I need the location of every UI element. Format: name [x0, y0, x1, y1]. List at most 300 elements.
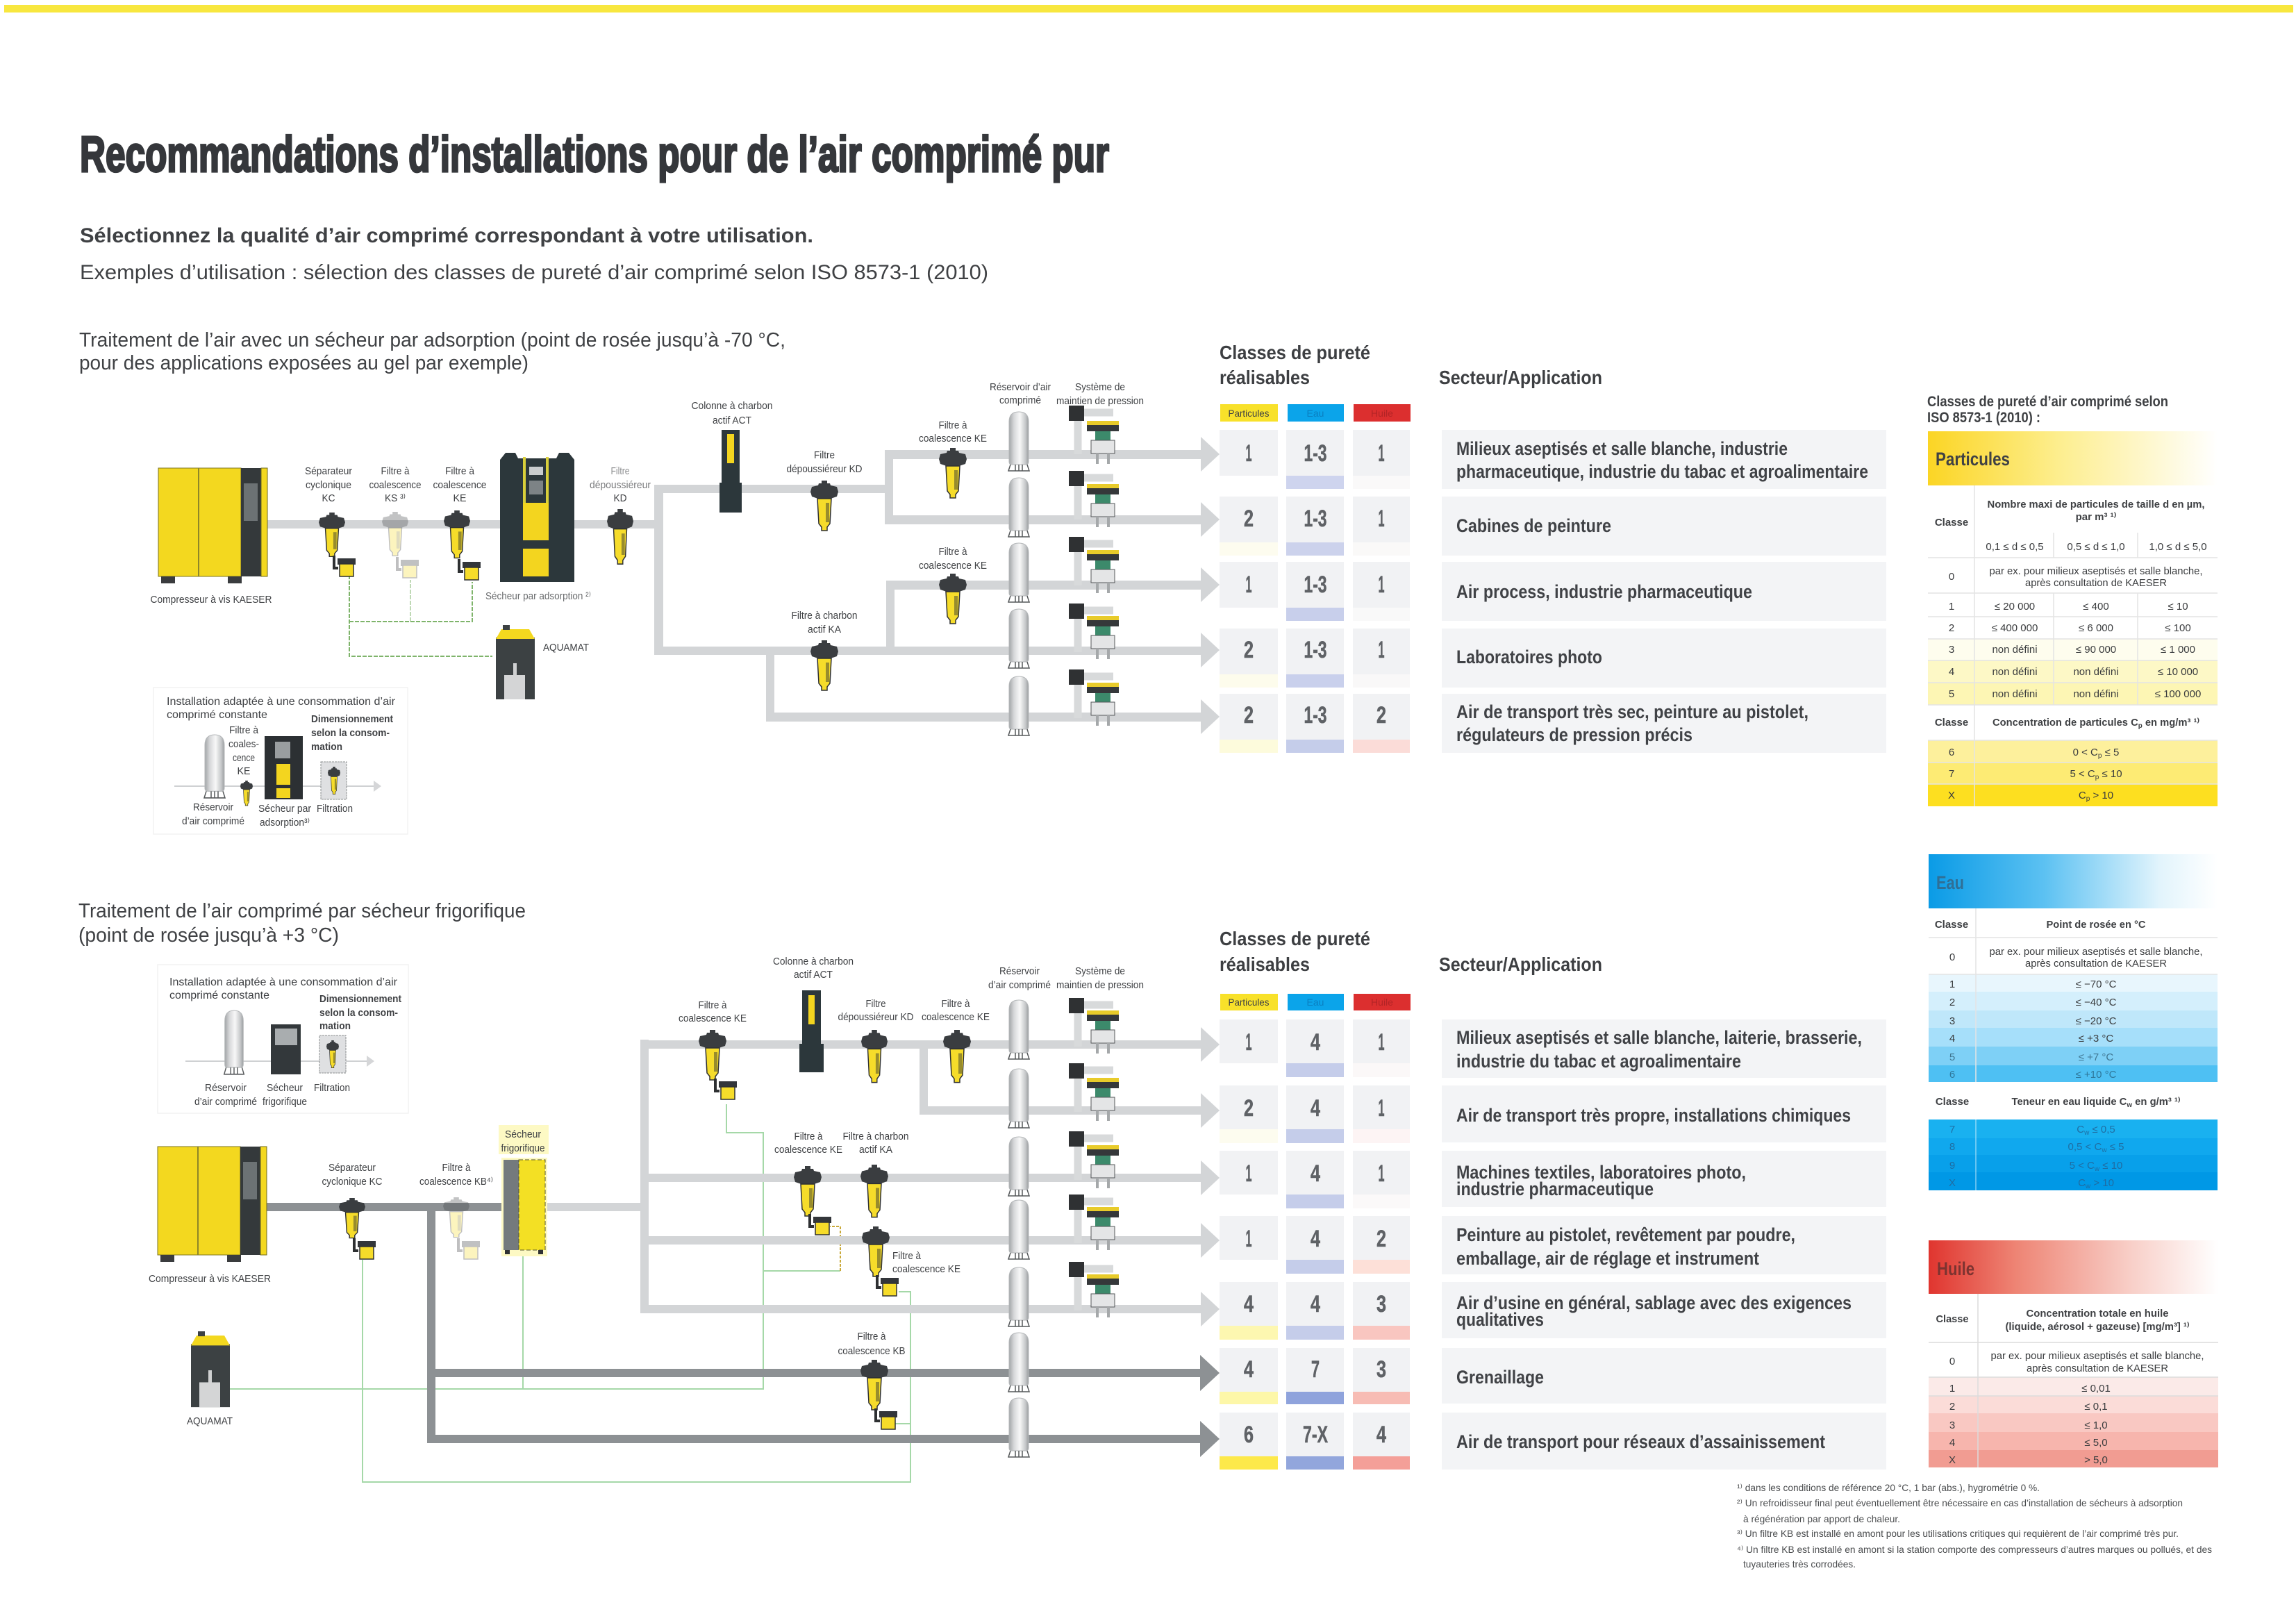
table: particules: ≤ 100 [2165, 622, 2191, 634]
inset: constant consumption (adsorption): selon la consom- [311, 727, 390, 739]
refrigerated dryer: Sécheur [505, 1129, 541, 1140]
table: eau: Classe [1936, 1096, 1969, 1108]
applications list, bottom: Grenaillage [1456, 1367, 1544, 1388]
applications list, bottom: qualitatives [1456, 1309, 1544, 1330]
applications list, top: Air de transport très sec, peinture au pistolet, [1456, 701, 1808, 722]
table: particules: ≤ 6 000 [2079, 622, 2113, 634]
table: huile: Classe [1936, 1313, 1968, 1325]
table: particules: ≤ 20 000 [1995, 601, 2035, 613]
dust filter KD (main line) [786, 449, 863, 531]
section heading: adsorption dryer: pour des applications exposées au gel par exemple) [79, 352, 529, 374]
table: eau: ≤ +3 °C [2079, 1033, 2113, 1044]
table: eau: ≤ +7 °C [2079, 1051, 2113, 1063]
purity class grid, bottom: 1 [1378, 1029, 1385, 1056]
inset: constant consumption (refrigerated): frigorifique [263, 1096, 307, 1108]
table: particules: 5 < C [2070, 768, 2095, 780]
inset: constant consumption (refrigerated): comprimé constante [169, 990, 269, 1001]
inset: constant consumption (adsorption) [153, 688, 408, 834]
purity class grid, bottom: 7 [1311, 1356, 1320, 1383]
table: particules: p [2138, 722, 2143, 730]
compressed air tanks: d’air comprimé [988, 979, 1051, 991]
table: eau: X [1949, 1177, 1956, 1189]
table: eau: w [2126, 1101, 2132, 1109]
coalescing filter KE top branch: Filtre à [939, 419, 967, 431]
pressure maintenance systems: Système de [1075, 381, 1125, 393]
table: eau: 1 [1949, 979, 1955, 990]
purity class grid, bottom: 1 [1246, 1160, 1251, 1187]
dust filter KD [590, 465, 651, 564]
activated carbon filter KA: actif KA [808, 624, 841, 635]
coalescing filter KE: coalescence [433, 479, 486, 491]
table: particules: 7 [1949, 768, 1954, 780]
purity classes table header, bottom: Particules [1228, 997, 1270, 1008]
applications list, bottom: industrie pharmaceutique [1456, 1179, 1654, 1199]
table: eau: ≤ +10 °C [2076, 1069, 2117, 1081]
table heading: ISO classes [1927, 394, 2168, 426]
pressure maintenance systems: Système de [1075, 965, 1125, 977]
table: eau: 9 [1949, 1160, 1955, 1172]
inset: constant consumption (refrigerated): selon la consom- [319, 1007, 398, 1019]
table: huile: ≤ 0,01 [2081, 1383, 2111, 1395]
inset: constant consumption (refrigerated): Réservoir [205, 1082, 247, 1094]
table: particules: 0,5 ≤ d ≤ 1,0 [2067, 541, 2125, 553]
table: eau: ≤ 0,5 [2089, 1124, 2115, 1135]
inset: constant consumption (refrigerated) [158, 965, 408, 1113]
coalescing filter KB [838, 1331, 906, 1429]
applications list, top: régulateurs de pression précis [1456, 724, 1692, 745]
table: eau: 2 [1949, 997, 1955, 1008]
purity class grid, top: 1 [1378, 572, 1385, 598]
table: huile: après consultation de KAESER [2027, 1363, 2168, 1374]
coalescing filter KB (faded): coalescence KB⁴⁾ [419, 1176, 493, 1188]
dust filter KD: dépoussiéreur KD [838, 1011, 914, 1023]
coalescing filter KS (faded): coalescence [369, 479, 421, 491]
table: huile: 4 [1949, 1437, 1955, 1449]
cyclonic separator KC: KC [322, 492, 335, 504]
compressed air tanks [990, 381, 1051, 735]
table: eau: ≤ −40 °C [2076, 997, 2117, 1008]
cyclonic separator KC [305, 465, 356, 576]
purity class grid, top: 1 [1378, 440, 1385, 467]
inset: constant consumption (refrigerated): mation [319, 1020, 351, 1032]
table: particules: 5 [1949, 688, 1954, 700]
table: particules: ≤ 400 [2083, 601, 2109, 613]
purity class grid, top: 1-3 [1304, 506, 1326, 532]
table: huile: ≤ 5,0 [2084, 1437, 2108, 1449]
table: particules: ≤ 1 000 [2161, 644, 2195, 656]
applications list, top: Laboratoires photo [1456, 647, 1602, 667]
purity class grid, top [1220, 430, 1410, 753]
table: particules: non défini [1992, 688, 2038, 700]
cyclonic separator KC: cyclonique [306, 479, 351, 491]
section heading: refrigerated dryer [78, 900, 526, 947]
purity class grid, bottom: 1 [1378, 1095, 1385, 1122]
purity class grid, bottom: 4 [1311, 1291, 1320, 1317]
table: huile: ≤ 0,1 [2084, 1401, 2108, 1413]
pressure maintenance systems: maintien de pression [1056, 979, 1144, 991]
coalescing filter KE top branch: coalescence KE [919, 433, 987, 444]
compressed air tanks: Réservoir [999, 965, 1040, 977]
applications list, top [1442, 430, 1886, 753]
table: huile: 1 [1949, 1383, 1955, 1395]
table: particules: 1 [1949, 601, 1954, 613]
applications list, bottom [1442, 1019, 1886, 1470]
table: particules: non défini [2073, 666, 2119, 678]
table: eau: C [2077, 1124, 2084, 1135]
inset: constant consumption (refrigerated): d’air comprimé [194, 1096, 257, 1108]
table: eau: w [2101, 1147, 2107, 1154]
table: eau: > 10 [2090, 1177, 2114, 1189]
coalescing filter KE top branch [919, 419, 987, 498]
footnotes: à régénération par apport de chaleur. [1743, 1513, 1900, 1524]
table: particules: 0 < C [2073, 747, 2098, 758]
AQUAMAT [187, 1331, 233, 1427]
purity class grid, bottom: 1 [1378, 1160, 1385, 1187]
footnotes: ³⁾ Un filtre KB est installé en amont pour les utilisations critiques qui requièrent de l’air comprimé très pur. [1737, 1528, 2179, 1539]
table: huile: ≤ 1,0 [2084, 1420, 2108, 1431]
purity classes table header, top: Eau [1307, 408, 1324, 419]
dashed drain [830, 1226, 840, 1271]
section heading: adsorption dryer: Traitement de l’air avec un sécheur par adsorption (point de rosée jusqu’à -70 °C, [79, 329, 785, 351]
pressure maintenance systems [1056, 965, 1144, 1317]
table: particules: par ex. pour milieux aseptisés et salle blanche, [1989, 565, 2203, 577]
table: eau: 5 [1949, 1051, 1955, 1063]
purity classes table header, top: Huile [1371, 408, 1393, 419]
coalescing filter KE: KE [453, 492, 467, 504]
title: Recommandations d’installations pour de l’air comprimé pur [80, 127, 1109, 183]
table: eau: par ex. pour milieux aseptisés et salle blanche, [1989, 946, 2203, 958]
table: particules: C [2079, 790, 2086, 801]
table: particules: non défini [1992, 644, 2038, 656]
inset: constant consumption (adsorption): Filtre à [229, 724, 259, 736]
table: eau [1929, 854, 2218, 1190]
inset: constant consumption (adsorption): Dimensionnement [311, 713, 393, 725]
table: eau: Teneur en eau liquide C [2011, 1096, 2129, 1108]
coalescing filter KE third branch: Filtre à [939, 546, 967, 558]
purity class grid, top: 1 [1246, 572, 1251, 598]
coalescing filter KE (fourth row) [862, 1226, 960, 1296]
table: particules: 2 [1949, 622, 1954, 634]
inset: constant consumption (refrigerated): Filtration [314, 1082, 350, 1094]
table: eau: ≤ −70 °C [2076, 979, 2117, 990]
compressor [150, 468, 272, 606]
purity class grid, bottom: 4 [1244, 1356, 1254, 1383]
table: particules: 4 [1949, 666, 1954, 678]
table: eau: 7 [1949, 1124, 1955, 1135]
sector heading, top: Secteur/Application [1439, 367, 1602, 388]
panel: refrigerated process diagram [149, 956, 1220, 1482]
compressor [149, 1147, 271, 1285]
purity class grid, top: 2 [1244, 506, 1254, 532]
applications list, bottom: Peinture au pistolet, revêtement par poudre, [1456, 1224, 1795, 1245]
table: eau: 6 [1949, 1069, 1955, 1081]
purity classes table header, bottom: Huile [1371, 997, 1393, 1008]
table: eau: Point de rosée en °C [2046, 919, 2146, 931]
purity classes table header, top: Particules [1228, 408, 1270, 419]
dust filter KD [838, 998, 914, 1083]
inset: constant consumption (adsorption): adsorption³⁾ [260, 817, 310, 829]
subtitle: Sélectionnez la qualité d’air comprimé correspondant à votre utilisation. [80, 224, 813, 247]
panel: adsorption process diagram [150, 381, 1220, 735]
activated carbon filter KA: actif KA [859, 1144, 892, 1156]
purity class grid, bottom: 4 [1311, 1095, 1320, 1122]
activated carbon filter KA [843, 1131, 908, 1217]
section heading: adsorption dryer [79, 329, 785, 374]
inset: constant consumption (adsorption): cence [233, 752, 255, 764]
purity class grid, bottom: 1 [1246, 1226, 1251, 1252]
purity classes table header, bottom [1220, 928, 1411, 1010]
inset: constant consumption (adsorption): Installation adaptée à une consommation d’air [167, 696, 396, 708]
table: eau: ≤ −20 °C [2076, 1015, 2117, 1027]
table: huile: 0 [1949, 1356, 1955, 1367]
dust filter KD (main line): dépoussiéreur KD [786, 463, 863, 475]
purity class grid, top: 1-3 [1304, 572, 1326, 598]
inset: constant consumption (adsorption): Réservoir [193, 801, 233, 813]
dust filter KD: Filtre [611, 465, 629, 477]
cyclonic separator KC: cyclonique KC [322, 1176, 383, 1188]
purity classes table header, top: Classes de pureté [1220, 342, 1370, 363]
inset: constant consumption (adsorption): d’air comprimé [182, 815, 244, 827]
purity classes table header, top [1220, 342, 1411, 422]
refrigerated dryer: frigorifique [501, 1142, 544, 1154]
footnotes: ¹⁾ dans les conditions de référence 20 °C, 1 bar (abs.), hygrométrie 0 %. [1737, 1482, 2040, 1493]
coalescing filter KE (top right): coalescence KE [922, 1011, 990, 1023]
table: particules: ≤ 100 000 [2155, 688, 2201, 700]
activated carbon column ACT: Colonne à charbon [692, 400, 772, 412]
purity class grid, bottom: 1 [1246, 1029, 1251, 1056]
purity class grid, bottom: 2 [1244, 1095, 1254, 1122]
coalescing filter KE (left) [679, 999, 747, 1099]
table: eau: C [2078, 1177, 2086, 1189]
AQUAMAT: AQUAMAT [187, 1415, 233, 1427]
pressure maintenance systems: maintien de pression [1056, 395, 1144, 407]
compressor: Compresseur à vis KAESER [150, 594, 272, 606]
table: eau: 5 < C [2070, 1160, 2095, 1172]
intro line: Exemples d’utilisation : sélection des classes de pureté d’air comprimé selon ISO 8573-1 (2010) [80, 261, 988, 284]
pressure maintenance systems [1056, 381, 1144, 726]
inset: constant consumption (refrigerated): Dimensionnement [319, 993, 401, 1005]
table: particules: ≤ 10 [2168, 601, 2188, 613]
applications list, top: Air process, industrie pharmaceutique [1456, 581, 1752, 602]
AQUAMAT: AQUAMAT [543, 642, 589, 654]
table: huile: par ex. pour milieux aseptisés et salle blanche, [1990, 1350, 2204, 1362]
coalescing filter KS (faded) [369, 465, 421, 578]
coalescing filter KE (third row) [774, 1131, 842, 1235]
applications list, top: Milieux aseptisés et salle blanche, industrie [1456, 438, 1788, 459]
section heading: refrigerated dryer: Traitement de l’air comprimé par sécheur frigorifique [78, 900, 526, 922]
coalescing filter KE (left): coalescence KE [679, 1013, 747, 1024]
activated carbon column ACT [692, 400, 772, 513]
coalescing filter KB (faded): Filtre à [442, 1162, 471, 1174]
table: particules: 1,0 ≤ d ≤ 5,0 [2149, 541, 2207, 553]
table: particules: par m³ ¹⁾ [2076, 511, 2117, 523]
coalescing filter KE (third row): coalescence KE [774, 1144, 842, 1156]
activated carbon column ACT: Colonne à charbon [773, 956, 854, 967]
purity class grid, top: 1-3 [1304, 637, 1326, 663]
purity classes table header, bottom: Eau [1307, 997, 1324, 1008]
table: particules: en mg/m³ ¹⁾ [2143, 717, 2199, 729]
table: eau: ≤ 10 [2099, 1160, 2122, 1172]
table: particules: ≤ 400 000 [1992, 622, 2038, 634]
applications list, bottom: Machines textiles, laboratoires photo, [1456, 1162, 1746, 1183]
purity class grid, top: 1 [1378, 637, 1385, 663]
compressed air tanks: Réservoir d’air [990, 381, 1051, 393]
table: particules: p [2086, 795, 2090, 803]
purity class grid, top: 1-3 [1304, 440, 1326, 467]
table: particules: 0,1 ≤ d ≤ 0,5 [1986, 541, 2044, 553]
adsorption dryer [485, 453, 591, 602]
table: huile: 2 [1949, 1401, 1955, 1413]
table: eau: ≤ 5 [2107, 1141, 2124, 1153]
coalescing filter KS (faded): KS ³⁾ [385, 492, 406, 504]
purity class grid, bottom: 3 [1376, 1356, 1386, 1383]
purity class grid, bottom: 4 [1311, 1160, 1320, 1187]
adsorption dryer: Sécheur par adsorption ²⁾ [485, 590, 591, 602]
coalescing filter KE: Filtre à [445, 465, 475, 477]
footnotes [1737, 1482, 2212, 1570]
section heading: refrigerated dryer: (point de rosée jusqu’à +3 °C) [78, 924, 339, 947]
table: eau: 4 [1949, 1033, 1955, 1044]
refrigerated dryer [499, 1125, 549, 1256]
table: particules: Particules [1936, 449, 2010, 469]
activated carbon column ACT: actif ACT [713, 415, 751, 426]
main dark pipework [267, 1203, 1220, 1457]
table: eau: 3 [1949, 1015, 1955, 1027]
applications list, top: pharmaceutique, industrie du tabac et agroalimentaire [1456, 461, 1868, 482]
coalescing filter KE (third row): Filtre à [795, 1131, 823, 1142]
table: particules: 0 [1949, 571, 1954, 583]
purity class grid, bottom: 7-X [1303, 1422, 1328, 1448]
table heading: ISO classes: Classes de pureté d’air comprimé selon [1927, 394, 2168, 410]
coalescing filter KB: Filtre à [857, 1331, 886, 1342]
purity class grid, bottom [1220, 1019, 1410, 1470]
table: huile: Concentration totale en huile [2027, 1308, 2168, 1320]
coalescing filter KE third branch [919, 546, 987, 624]
inset: constant consumption (adsorption): KE [238, 765, 250, 777]
purity classes table header, bottom: Classes de pureté [1220, 928, 1370, 949]
table: particules: ≤ 5 [2102, 747, 2119, 758]
table: eau: 8 [1949, 1141, 1955, 1153]
pipework [546, 1027, 1220, 1326]
inset: constant consumption (adsorption): Sécheur par [258, 803, 311, 815]
inset: constant consumption (adsorption): comprimé constante [167, 709, 267, 721]
table: huile: X [1949, 1454, 1956, 1466]
table: particules: Classe [1935, 717, 1968, 729]
cyclonic separator KC: Séparateur [305, 465, 352, 477]
table: huile [1929, 1240, 2218, 1467]
applications list, bottom: Air d’usine en général, sablage avec des exigences [1456, 1292, 1852, 1313]
inset: constant consumption (refrigerated): Sécheur [267, 1082, 303, 1094]
purity class grid, bottom: 2 [1376, 1226, 1386, 1252]
dust filter KD: dépoussiéreur [590, 479, 651, 491]
purity class grid, bottom: 4 [1311, 1029, 1320, 1056]
applications list, bottom: Air de transport très propre, installations chimiques [1456, 1105, 1851, 1126]
activated carbon filter KA: Filtre à charbon [843, 1131, 908, 1142]
applications list, bottom: Milieux aseptisés et salle blanche, laiterie, brasserie, [1456, 1027, 1862, 1048]
condensate lines [349, 575, 492, 656]
coalescing filter KE [433, 465, 486, 580]
purity class grid, top: 2 [1244, 702, 1254, 729]
compressed air tanks [988, 965, 1051, 1457]
activated carbon filter KA: Filtre à charbon [792, 610, 857, 622]
top yellow bar [4, 5, 2293, 13]
table: particules: 3 [1949, 644, 1954, 656]
table: particules: Concentration de particules C [1993, 717, 2140, 729]
compressor: Compresseur à vis KAESER [149, 1273, 271, 1285]
dust filter KD (main line): Filtre [814, 449, 835, 461]
table: huile: 3 [1949, 1420, 1955, 1431]
inset: constant consumption (adsorption): mation [311, 741, 342, 753]
purity classes table header, top: réalisables [1220, 367, 1310, 388]
cyclonic separator KC: Séparateur [328, 1162, 376, 1174]
purity class grid, top: 1 [1378, 506, 1385, 532]
AQUAMAT [496, 625, 589, 699]
applications list, bottom: emballage, air de réglage et instrument [1456, 1248, 1759, 1269]
purity class grid, top: 1-3 [1304, 702, 1326, 729]
coalescing filter KE (fourth row): Filtre à [892, 1250, 922, 1262]
table: eau: en g/m³ ¹⁾ [2132, 1096, 2181, 1108]
table: particules: non défini [2073, 688, 2119, 700]
table: eau: 0 [1949, 951, 1955, 963]
table: particules: non défini [1992, 666, 2038, 678]
applications list, top: Cabines de peinture [1456, 515, 1611, 536]
applications list, bottom: Air de transport pour réseaux d’assainissement [1456, 1431, 1825, 1452]
table: particules: X [1948, 790, 1955, 801]
table: particules: Classe [1935, 517, 1968, 528]
coalescing filter KE third branch: coalescence KE [919, 560, 987, 572]
table: eau: Eau [1936, 872, 1964, 893]
compressed air tanks: comprimé [999, 394, 1041, 406]
condensate lines [229, 1104, 910, 1482]
dust filter KD: Filtre [865, 998, 886, 1010]
inset: constant consumption (refrigerated): Installation adaptée à une consommation d’air [169, 976, 398, 988]
table: huile: (liquide, aérosol + gazeuse) [mg/m³] ¹⁾ [2006, 1321, 2190, 1333]
coalescing filter KB: coalescence KB [838, 1345, 906, 1357]
table: particules: ≤ 10 000 [2158, 666, 2198, 678]
table: eau: w [2094, 1165, 2100, 1173]
table: particules: p [2095, 774, 2099, 781]
pipework [267, 437, 1220, 734]
table: particules [1928, 431, 2218, 806]
purity class grid, bottom: 3 [1376, 1291, 1386, 1317]
footnotes: ⁴⁾ Un filtre KB est installé en amont si la station comporte des compresseurs d’autres marques ou pollués, et des [1737, 1544, 2212, 1555]
coalescing filter KE (fourth row): coalescence KE [892, 1263, 960, 1275]
inset: constant consumption (adsorption): coales- [228, 738, 259, 750]
sector heading, bottom: Secteur/Application [1439, 954, 1602, 975]
table: particules: > 10 [2090, 790, 2113, 801]
applications list, bottom: industrie du tabac et agroalimentaire [1456, 1051, 1741, 1072]
purity class grid, bottom: 4 [1244, 1291, 1254, 1317]
table: particules: 6 [1949, 747, 1954, 758]
table: huile: > 5,0 [2084, 1454, 2108, 1466]
activated carbon filter KA [792, 610, 857, 690]
table: particules: ≤ 10 [2099, 768, 2122, 780]
table: eau: 0,5 < C [2068, 1141, 2102, 1153]
table: particules: p [2098, 752, 2102, 760]
dust filter KD: KD [614, 492, 627, 504]
table: eau: w [2085, 1183, 2091, 1190]
purity class grid, top: 1 [1246, 440, 1251, 467]
footnotes: tuyauteries très corrodées. [1743, 1558, 1856, 1570]
purity class grid, bottom: 4 [1311, 1226, 1320, 1252]
coalescing filter KB (faded) [419, 1162, 493, 1259]
purity classes table header, bottom: réalisables [1220, 954, 1310, 975]
footnotes: ²⁾ Un refroidisseur final peut éventuellement être nécessaire en cas d’installation de sécheurs à adsorption [1737, 1497, 2183, 1508]
table: eau: Classe [1935, 919, 1968, 931]
table: particules: après consultation de KAESER [2025, 577, 2167, 589]
table: eau: w [2083, 1129, 2090, 1137]
table: eau: après consultation de KAESER [2025, 958, 2167, 969]
